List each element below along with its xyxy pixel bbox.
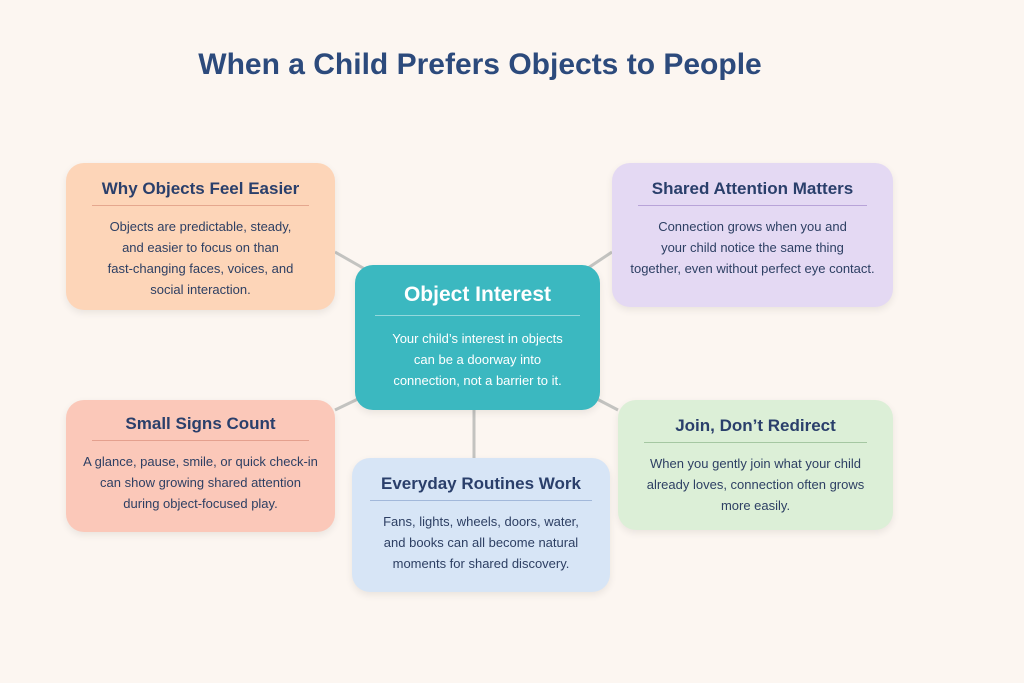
panel: object interest (center): can be a doorway into (414, 352, 541, 367)
panel: shared attention matters: together, even without perfect eye contact. (630, 261, 875, 276)
panel: why objects feel easier: social interaction. (150, 282, 251, 297)
panel: small signs count: can show growing shared attention (100, 475, 301, 490)
panel: why objects feel easier (66, 163, 335, 310)
panel: everyday routines work (352, 458, 610, 592)
panel: everyday routines work: moments for shared discovery. (393, 556, 569, 571)
panel: everyday routines work: Fans, lights, wheels, doors, water, (383, 514, 579, 529)
panel: join, don't redirect: Join, Don’t Redirect (675, 416, 836, 435)
title: When a Child Prefers Objects to People (198, 48, 762, 81)
panel: shared attention matters: your child notice the same thing (661, 240, 844, 255)
panel: object interest (center) (355, 265, 600, 410)
panel: object interest (center): Your child’s interest in objects (392, 331, 563, 346)
panel: shared attention matters: Connection grows when you and (658, 219, 847, 234)
panel: join, don't redirect: When you gently join what your child (650, 456, 861, 471)
panel: object interest (center): Object Interest (404, 283, 551, 306)
panel: why objects feel easier: fast-changing faces, voices, and (108, 261, 293, 276)
panel: object interest (center): connection, not a barrier to it. (393, 373, 562, 388)
panel: everyday routines work: Everyday Routines Work (381, 474, 581, 493)
panel: everyday routines work: and books can all become natural (384, 535, 578, 550)
panel: small signs count: during object-focused play. (123, 496, 278, 511)
panel: join, don't redirect: more easily. (721, 498, 790, 513)
panel: shared attention matters (612, 163, 893, 307)
panel: why objects feel easier: Objects are predictable, steady, (110, 219, 291, 234)
panel: small signs count (66, 400, 335, 532)
panel: join, don't redirect: already loves, connection often grows (647, 477, 864, 492)
panel: small signs count: Small Signs Count (125, 414, 276, 433)
panel: join, don't redirect (618, 400, 893, 530)
panel: shared attention matters: Shared Attention Matters (652, 179, 853, 198)
panel: small signs count: A glance, pause, smile, or quick check-in (83, 454, 318, 469)
panel: why objects feel easier: and easier to focus on than (122, 240, 279, 255)
panel: why objects feel easier: Why Objects Feel Easier (102, 179, 299, 198)
